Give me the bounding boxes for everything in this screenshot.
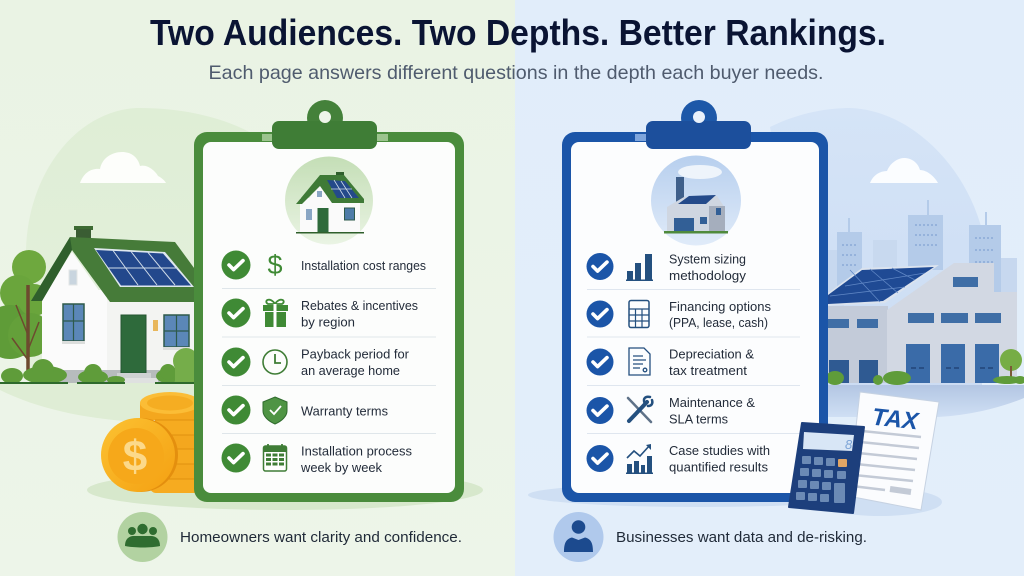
row: case studies (586, 444, 770, 474)
backdrop disc (26, 108, 255, 400)
icon: gold coin: $ (123, 432, 147, 481)
row: warranty: Warranty terms (301, 404, 388, 418)
row: payback: Payback period for (301, 348, 409, 362)
row: depreciation: tax treatment (669, 364, 748, 378)
panel: homeowner scene (0, 108, 483, 510)
icon: people (125, 524, 160, 548)
row: sizing: System sizing (669, 252, 746, 266)
clip (272, 100, 377, 149)
clip (646, 100, 751, 149)
board (562, 132, 828, 502)
row: process (222, 444, 412, 475)
icon: bars (626, 254, 653, 281)
tax label: TAX (871, 404, 921, 436)
row dividers (587, 290, 800, 434)
row: financing: Financing options (669, 300, 771, 314)
bushes (0, 348, 199, 384)
row: installation cost ranges: Installation cost ranges (301, 259, 426, 273)
icon: gold coin (101, 418, 178, 492)
warehouse with solar roof (828, 263, 1017, 383)
icon: gift (263, 300, 288, 327)
row dividers (222, 288, 436, 434)
row: process: week by week (300, 461, 383, 475)
row: maintenance: Maintenance & (669, 396, 756, 410)
row: sizing (586, 252, 747, 283)
background: business half (515, 0, 1024, 576)
subtitle: Each page answers different questions in the depth each buyer needs. (208, 62, 824, 84)
icon: document (629, 348, 650, 375)
tree (0, 250, 52, 373)
row: case studies: quantified results (669, 460, 768, 474)
row: rebates (222, 298, 418, 330)
row: maintenance: SLA terms (669, 412, 728, 426)
icon: growth chart (626, 444, 653, 474)
row: depreciation: Depreciation & (669, 348, 755, 362)
ground (826, 385, 1024, 417)
callout: businesses: Businesses want data and de-risking. (616, 530, 867, 546)
row: installation cost ranges (222, 250, 426, 280)
icon: clock (263, 350, 287, 374)
ground (0, 383, 200, 423)
icon: calculator (629, 300, 649, 328)
icon: shield (263, 397, 287, 424)
panel: homeowner clipboard (194, 100, 464, 502)
house with solar roof (31, 226, 197, 383)
callout: homeowners (118, 512, 462, 562)
row: warranty (222, 396, 388, 424)
row: rebates: Rebates & incentives (301, 299, 418, 313)
board (194, 132, 464, 502)
panel: business clipboard (562, 100, 828, 502)
city skyline (828, 200, 1017, 310)
backdrop disc (770, 108, 982, 400)
background: homeowner half (0, 0, 515, 576)
icon: coin stack (140, 392, 200, 493)
row: payback: an average home (301, 364, 400, 378)
row: sizing: methodology (669, 269, 747, 283)
icon: business person (564, 520, 593, 552)
panel: business scene (528, 108, 1024, 516)
icon: calendar (264, 444, 286, 471)
row: payback (222, 348, 409, 378)
board shadow (87, 470, 483, 510)
callout: homeowners: Homeowners want clarity and confidence. (180, 530, 462, 546)
row: depreciation (586, 348, 755, 378)
illustration: calculator: 8 (845, 437, 853, 452)
row: case studies: Case studies with (669, 444, 770, 458)
illustration: mini factory (651, 156, 741, 246)
board shadow (528, 483, 872, 507)
callout: businesses (554, 512, 867, 562)
row: rebates: by region (301, 316, 355, 330)
icon: cloud (80, 152, 166, 183)
illustration: mini house (285, 156, 373, 244)
illustration: calculator (789, 423, 864, 513)
row: maintenance (586, 396, 756, 426)
shrubs and tree (826, 349, 1024, 385)
icon: cloud (870, 158, 938, 183)
illustration: tax document (848, 392, 939, 510)
icon: wrench (628, 397, 652, 422)
row: process: Installation process (301, 444, 412, 458)
row: financing: (PPA, lease, cash) (669, 316, 768, 330)
title: Two Audiences. Two Depths. Better Rankings. (150, 12, 886, 53)
row: financing (586, 300, 771, 330)
icon: dollar: $ (267, 250, 283, 280)
